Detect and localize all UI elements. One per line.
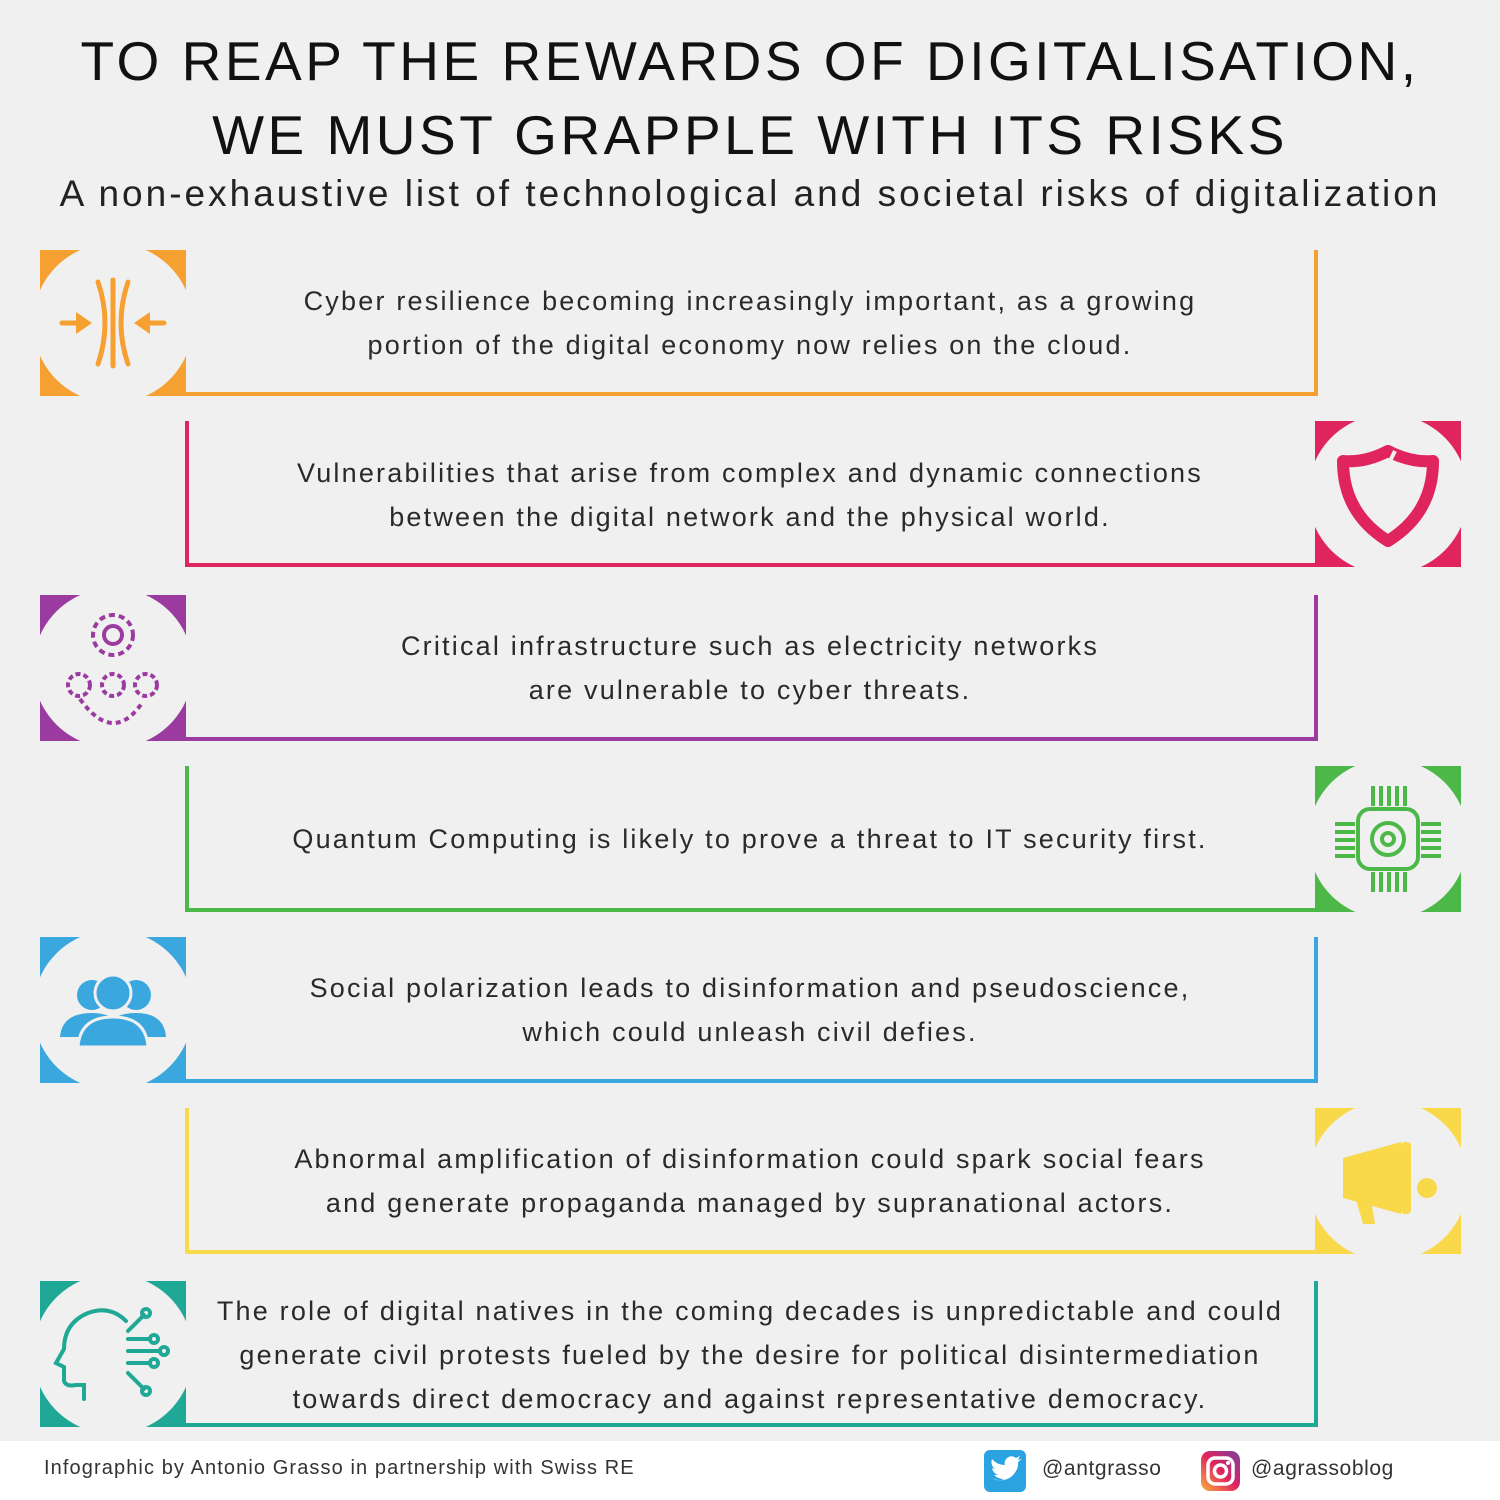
text: are vulnerable to cyber threats.: [529, 675, 971, 705]
text: Abnormal amplification of disinformation could spark social fears: [294, 1144, 1206, 1174]
text: Social polarization leads to disinformation and pseudoscience,: [310, 973, 1190, 1003]
icon: compress arrows: [40, 250, 186, 396]
text: which could unleash civil defies.: [522, 1017, 978, 1047]
frame: [186, 250, 1318, 396]
panel 4: quantum computing: [185, 766, 1461, 912]
icon: megaphone: [1315, 1108, 1461, 1254]
text: between the digital network and the physical world.: [389, 502, 1111, 532]
text: [297, 458, 1203, 532]
frame: [185, 1108, 1315, 1254]
panel 3: critical infrastructure: [40, 595, 1318, 741]
frame: [185, 421, 1315, 567]
footer: [0, 1441, 1500, 1500]
icon: instagram: [1201, 1451, 1240, 1491]
text: towards direct democracy and against representative democracy.: [293, 1384, 1207, 1414]
icon: people: [40, 937, 186, 1083]
text: Vulnerabilities that arise from complex and dynamic connections: [297, 458, 1203, 488]
panel 7: digital natives: [40, 1281, 1318, 1427]
text: [304, 286, 1196, 360]
text: [217, 1296, 1283, 1414]
text: [294, 1144, 1206, 1218]
text: and generate propaganda managed by supranational actors.: [326, 1188, 1174, 1218]
subtitle: A non-exhaustive list of technological and societal risks of digitalization: [60, 173, 1440, 214]
panel 5: social polarization: [40, 937, 1318, 1083]
icon: twitter: [984, 1450, 1026, 1492]
text: Critical infrastructure such as electricity networks: [401, 631, 1099, 661]
text: portion of the digital economy now relies on the cloud.: [368, 330, 1132, 360]
text: The role of digital natives in the coming decades is unpredictable and could: [217, 1296, 1283, 1326]
icon: broken shield: [1315, 421, 1461, 567]
icon: gears: [40, 595, 186, 741]
twitter handle: @antgrasso: [1042, 1457, 1162, 1480]
frame: [186, 595, 1318, 741]
frame: [185, 766, 1315, 912]
panel 1: cyber resilience: [40, 250, 1318, 396]
title: WE MUST GRAPPLE WITH ITS RISKS: [212, 104, 1288, 166]
panel 6: amplification of disinformation: [185, 1108, 1461, 1254]
title: TO REAP THE REWARDS OF DIGITALISATION,: [80, 30, 1420, 92]
frame: [186, 1281, 1318, 1427]
text: Quantum Computing is likely to prove a threat to IT security first.: [292, 824, 1208, 854]
text: [310, 973, 1190, 1047]
text: [401, 631, 1099, 705]
text: generate civil protests fueled by the desire for political disintermediation: [239, 1340, 1261, 1370]
title: [80, 30, 1420, 166]
text: Cyber resilience becoming increasingly important, as a growing: [304, 286, 1196, 316]
icon: chip: [1315, 766, 1461, 912]
instagram handle: @agrassoblog: [1251, 1457, 1394, 1480]
panel 2: vulnerabilities: [185, 421, 1461, 567]
icon: head with circuits: [40, 1281, 186, 1427]
frame: [186, 937, 1318, 1083]
credit: Infographic by Antonio Grasso in partnership with Swiss RE: [44, 1457, 635, 1479]
